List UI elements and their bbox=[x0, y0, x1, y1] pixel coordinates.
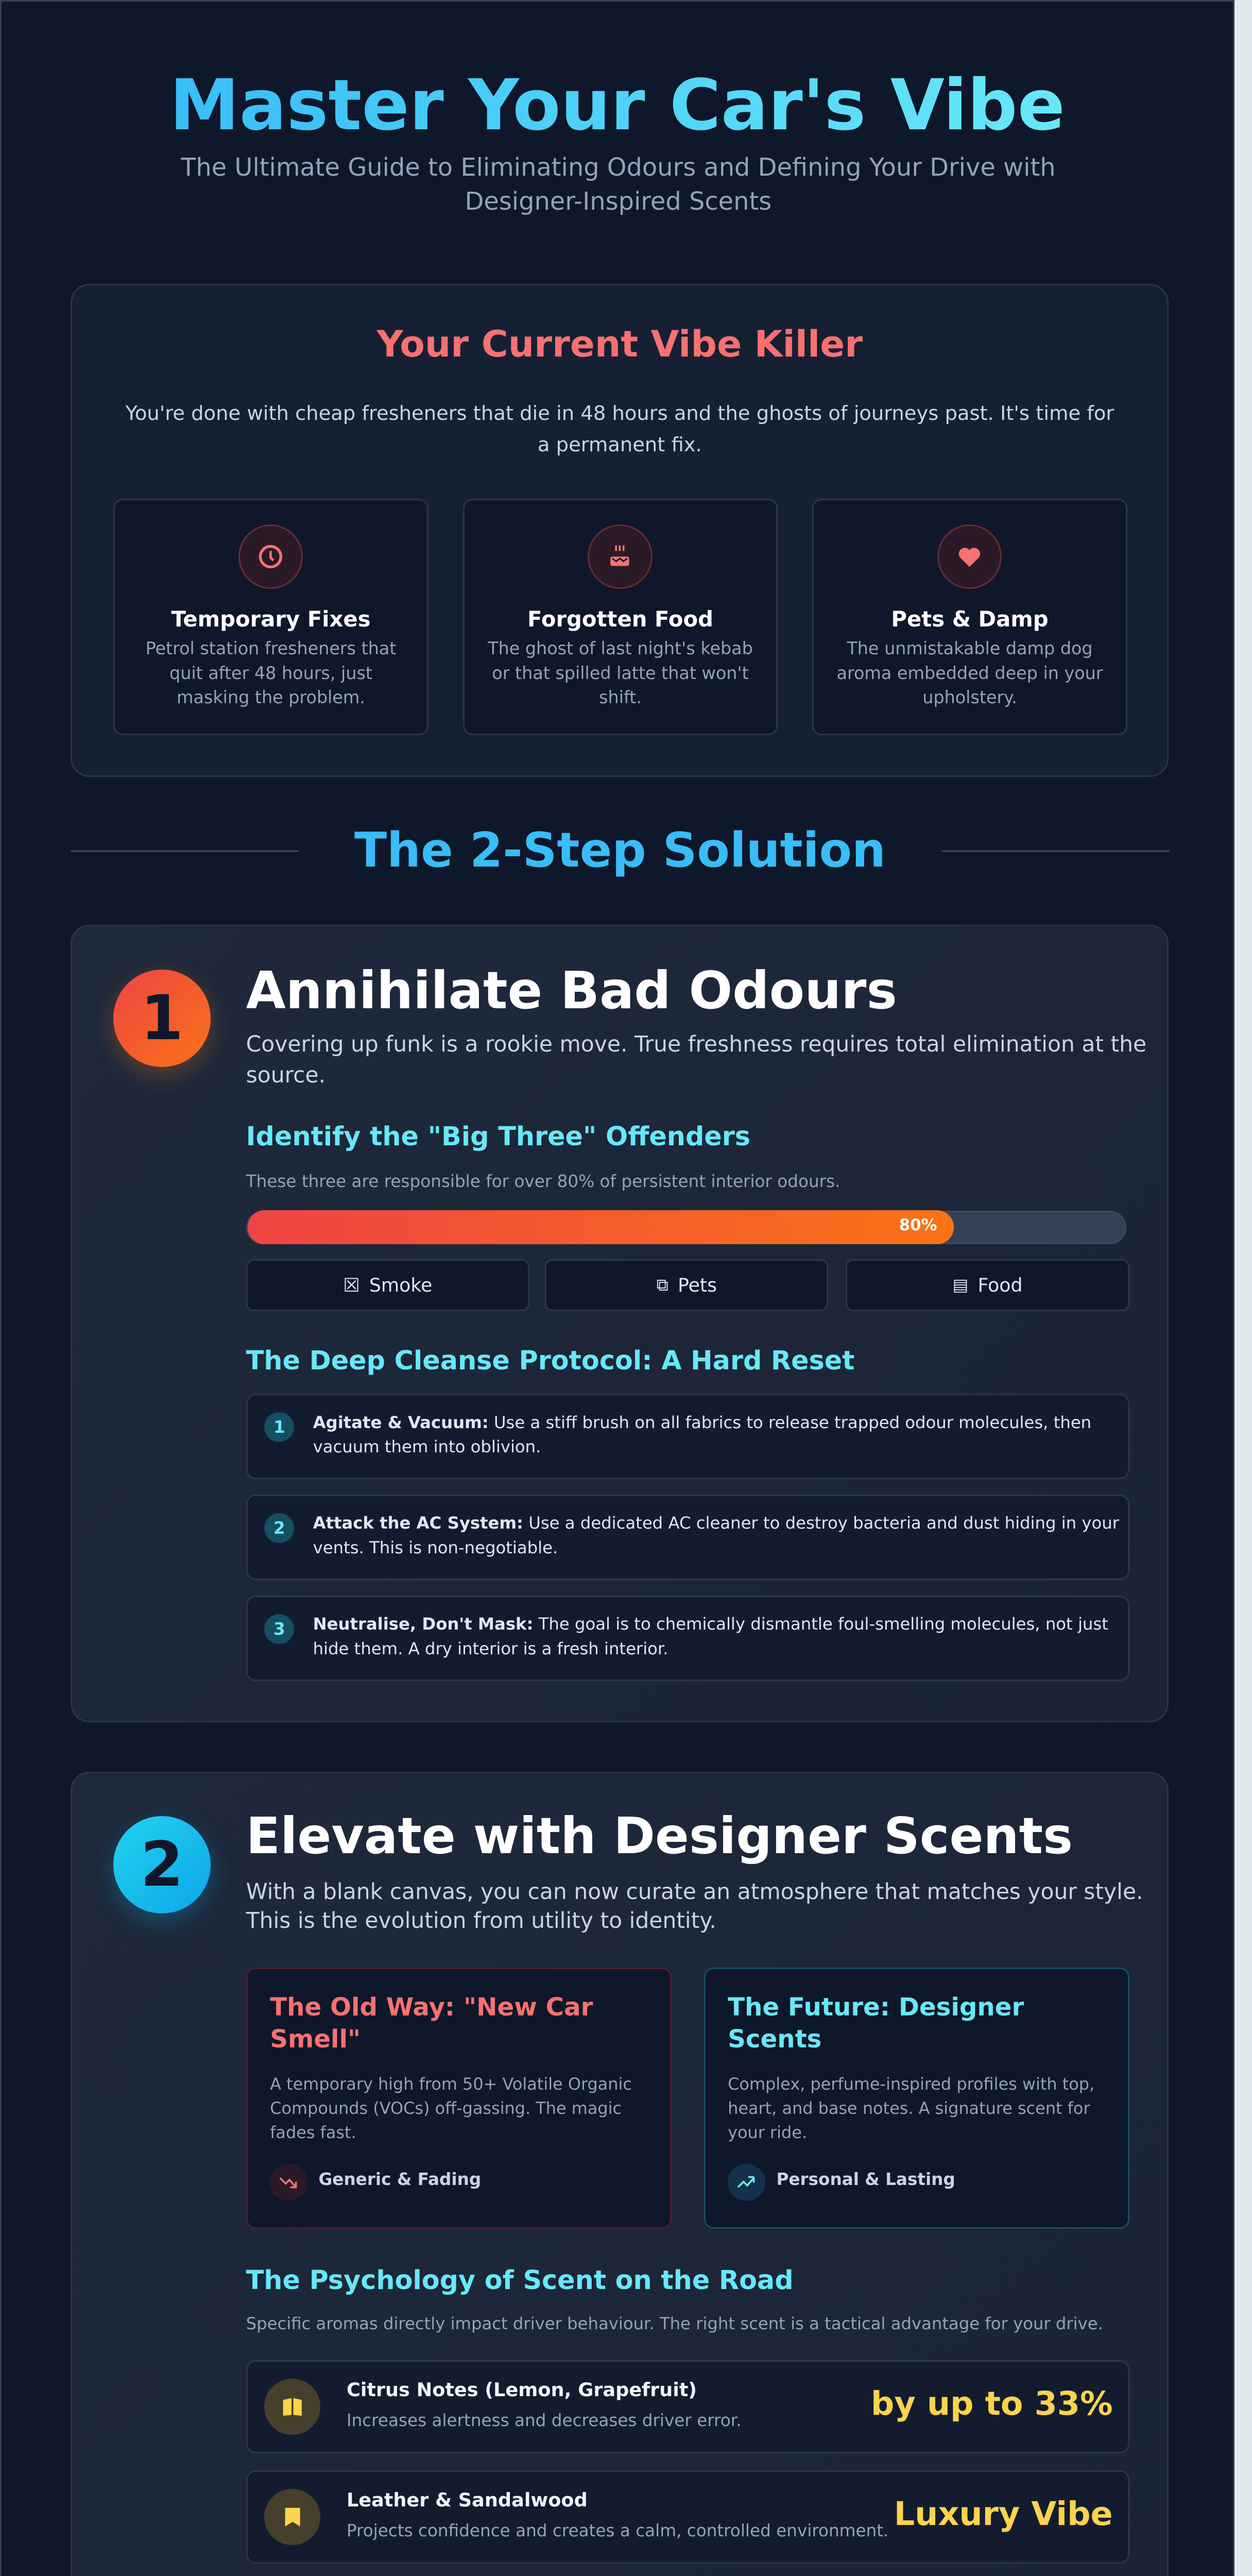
card: temporary fixes bbox=[113, 499, 428, 735]
card: old way bbox=[246, 1968, 672, 2229]
step 2: 2 bbox=[273, 1518, 285, 1538]
card text: The ghost of last night's kebab or that spilled latte that won't shift. bbox=[488, 638, 753, 707]
icon: citrus bbox=[264, 2379, 320, 2435]
tag: pets: Pets bbox=[678, 1274, 717, 1296]
row: citrus: by up to 33% bbox=[871, 2384, 1113, 2422]
panel: step 1 bbox=[71, 925, 1169, 1722]
card text: Complex, perfume-inspired profiles with top, heart, and base notes. A signature scent for your ride. bbox=[728, 2074, 1094, 2142]
tag: smoke: Smoke bbox=[369, 1274, 432, 1296]
tag: food: ▤ bbox=[953, 1275, 968, 1295]
heading: elevate: Elevate with Designer Scents bbox=[246, 1807, 1073, 1865]
icon: clock bbox=[238, 524, 303, 589]
icon: bookmark bbox=[264, 2489, 320, 2545]
note: Specific aromas directly impact driver behaviour. The right scent is a tactical advantage for your drive. bbox=[246, 2314, 1103, 2333]
row: citrus bbox=[246, 2360, 1129, 2453]
title: Master Your Car's Vibe bbox=[169, 65, 1065, 146]
heading: annihilate: Annihilate Bad Odours bbox=[246, 960, 897, 1021]
step 3 bbox=[246, 1596, 1129, 1681]
description: With a blank canvas, you can now curate an atmosphere that matches your style. This is the evolution from utility to identity. bbox=[246, 1879, 1143, 1934]
bar chart: 80% bbox=[246, 1211, 1126, 1244]
tag: food: Food bbox=[977, 1274, 1022, 1296]
card title: The Future: Designer Scents bbox=[728, 1993, 1024, 2054]
card title: Pets & Damp bbox=[891, 606, 1049, 632]
badge: generic & fading: Generic & Fading bbox=[319, 2170, 481, 2189]
subheading: deep cleanse: The Deep Cleanse Protocol: A Hard Reset bbox=[246, 1345, 855, 1376]
subheading: big three: Identify the "Big Three" Offenders bbox=[246, 1121, 750, 1151]
tag: food bbox=[846, 1259, 1129, 1311]
panel: step 2 bbox=[71, 1772, 1169, 2576]
tag: smoke: ☒ bbox=[343, 1274, 360, 1296]
row: citrus: Citrus Notes (Lemon, Grapefruit) bbox=[347, 2379, 697, 2401]
subtitle: The Ultimate Guide to Eliminating Odours and Defining Your Drive with Designer-Inspired Scents bbox=[181, 154, 1056, 216]
bar chart: 80%: 80% bbox=[899, 1216, 937, 1234]
icon: number 1: 1 bbox=[141, 982, 183, 1054]
step 1: 1 bbox=[273, 1417, 285, 1437]
note: These three are responsible for over 80% of persistent interior odours. bbox=[246, 1172, 840, 1191]
heading: 2-step solution: The 2-Step Solution bbox=[354, 822, 886, 878]
icon: number 1 bbox=[113, 970, 211, 1067]
icon: food bbox=[588, 524, 653, 589]
row: leather: Projects confidence and creates a calm, controlled environment. bbox=[347, 2521, 888, 2540]
step 2: Attack the AC System: Use a dedicated AC cleaner to destroy bacteria and dust hiding in your vents. This is non-negotiable. bbox=[313, 1513, 1119, 1557]
card title: Forgotten Food bbox=[527, 606, 713, 632]
badge: personal & lasting: Personal & Lasting bbox=[776, 2170, 955, 2189]
step 2 bbox=[246, 1495, 1129, 1580]
step 1: Agitate & Vacuum: Use a stiff brush on all fabrics to release trapped odour molecules, then vacuum them into oblivion. bbox=[313, 1413, 1091, 1456]
card title: Temporary Fixes bbox=[171, 606, 371, 632]
card text: A temporary high from 50+ Volatile Organic Compounds (VOCs) off-gassing. The magic fades fast. bbox=[270, 2074, 632, 2142]
badge: personal & lasting bbox=[728, 2164, 955, 2201]
step 1 bbox=[246, 1394, 1129, 1479]
card: future bbox=[704, 1968, 1129, 2229]
card text: The unmistakable damp dog aroma embedded deep in your upholstery. bbox=[836, 638, 1103, 707]
badge: generic & fading bbox=[270, 2164, 481, 2201]
tag: pets bbox=[545, 1259, 828, 1311]
heading: vibe killer: Your Current Vibe Killer bbox=[377, 323, 863, 365]
step 3: Neutralise, Don't Mask: The goal is to chemically dismantle foul-smelling molecules, not just hide them. A dry interior is a fresh interior. bbox=[313, 1614, 1108, 1658]
tag: pets: ⧉ bbox=[657, 1275, 668, 1295]
row: citrus: Increases alertness and decreases driver error. bbox=[347, 2411, 742, 2430]
intro text: You're done with cheap fresheners that die in 48 hours and the ghosts of journeys past. It's time for a permanent fix. bbox=[125, 402, 1114, 456]
icon: heart bbox=[937, 524, 1002, 589]
row: leather: Leather & Sandalwood bbox=[347, 2489, 588, 2511]
panel: vibe killer bbox=[71, 284, 1169, 777]
icon: number 2: 2 bbox=[141, 1829, 183, 1901]
step 3: 3 bbox=[273, 1619, 285, 1639]
subheading: psychology: The Psychology of Scent on the Road bbox=[246, 2265, 794, 2295]
heading: 2-step solution bbox=[71, 822, 1170, 878]
icon: number 2 bbox=[113, 1816, 211, 1913]
card: pets & damp bbox=[812, 499, 1127, 735]
card title: The Old Way: "New Car Smell" bbox=[270, 1993, 593, 2054]
row: leather bbox=[246, 2470, 1129, 2564]
row: leather: Luxury Vibe bbox=[894, 2495, 1113, 2533]
tag: smoke bbox=[246, 1259, 529, 1311]
card: forgotten food bbox=[463, 499, 778, 735]
description: Covering up funk is a rookie move. True freshness requires total elimination at the source. bbox=[246, 1032, 1146, 1088]
card text: Petrol station fresheners that quit after 48 hours, just masking the problem. bbox=[146, 638, 396, 707]
